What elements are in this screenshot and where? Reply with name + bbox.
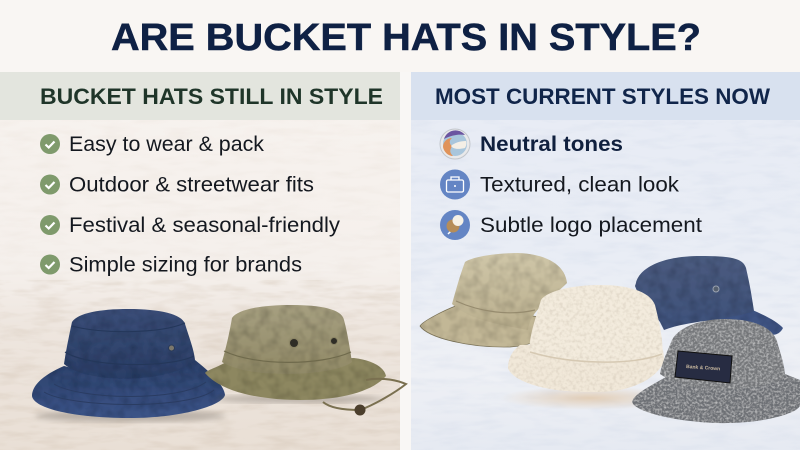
khaki hat crown [452, 253, 567, 330]
panel: bucket hats still in style [0, 72, 400, 276]
drawstring cord [323, 379, 406, 410]
sherpa hat brim [508, 340, 664, 392]
checklist [40, 133, 341, 276]
illustration: grey wool bucket hat [632, 319, 800, 423]
left panel heading: BUCKET HATS STILL IN STYLE [40, 84, 383, 109]
item: textured clean look: Textured, clean look [480, 174, 680, 196]
olive hat crown [222, 305, 352, 374]
item: simple sizing: Simple sizing for brands [69, 254, 302, 276]
style list [440, 129, 702, 240]
item: subtle logo placement [440, 210, 702, 240]
title: ARE BUCKET HATS IN STYLE? [111, 17, 701, 59]
grey hat crown [660, 319, 785, 389]
item: festival: Festival & seasonal-friendly [69, 214, 341, 237]
item: easy to wear: Easy to wear & pack [69, 133, 265, 156]
item: textured clean look [440, 170, 680, 200]
grey hat brim [632, 372, 800, 423]
panel: most current styles now [411, 72, 800, 240]
denim hat brim [700, 305, 783, 335]
navy hat crown [64, 309, 195, 379]
right panel heading: MOST CURRENT STYLES NOW [435, 84, 771, 109]
khaki hat brim [420, 305, 560, 347]
background: right snow panel [411, 72, 800, 450]
illustration: cream sherpa bucket hat [500, 285, 680, 410]
sherpa hat crown [530, 285, 663, 362]
item: neutral tones [440, 129, 623, 159]
illustration: navy bucket hat [32, 309, 225, 422]
item: subtle logo placement: Subtle logo placement [480, 214, 702, 237]
olive hat brim [205, 358, 386, 400]
leather logo patch [675, 351, 732, 383]
illustration: khaki bucket hat [420, 253, 567, 347]
illustration: blue denim bucket hat [635, 256, 783, 335]
background: left snow panel [0, 0, 400, 450]
illustration: olive bucket hat [205, 305, 406, 416]
right panel header band [411, 72, 800, 120]
left panel header band [0, 72, 400, 120]
item: outdoor fits: Outdoor & streetwear fits [69, 174, 314, 196]
denim hat crown [635, 256, 754, 330]
navy hat brim [32, 360, 225, 418]
leather logo patch: Bank & Crown [686, 364, 720, 372]
item: neutral tones: Neutral tones [480, 133, 623, 156]
